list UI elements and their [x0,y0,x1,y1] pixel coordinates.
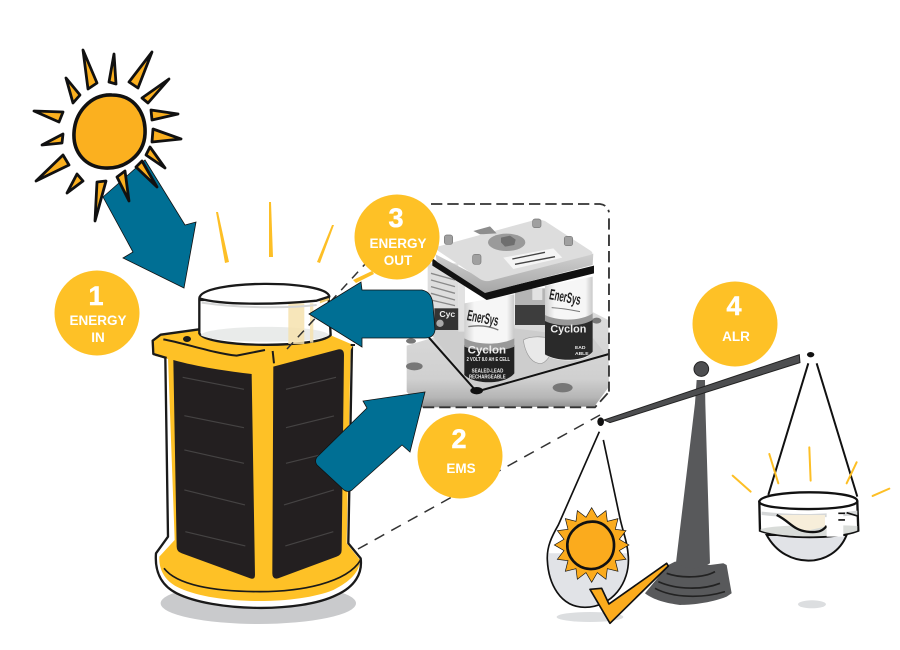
right pan strings [768,363,857,497]
glow rays on right pan [733,447,889,496]
right pan dome [767,535,847,561]
pivot ball [694,362,709,376]
lantern lens [199,284,331,345]
back cell centre [515,288,546,325]
cell right [545,277,593,360]
badge 2: EMS: EMS [446,461,476,476]
icon: sun [34,50,181,221]
badge 4: ALR [692,282,778,366]
cell right: EnerSys [548,286,582,309]
battery top plate [432,219,594,300]
rays above lantern [216,202,334,263]
solar lantern [153,284,361,624]
dashed callout line: lantern to battery [358,415,600,549]
right pan shadow [798,600,826,608]
battery photo [405,204,609,407]
scale beam [604,355,800,423]
cell right: ABLE [575,351,589,357]
scale post [676,380,710,568]
check mark [590,563,668,623]
arrow: energy in [103,160,196,288]
cell front: Cyclon [468,344,506,356]
scale base ridges [655,572,725,596]
dashed callout line: lens to battery [287,262,367,349]
arrow: energy out [309,282,435,347]
cell front: SEALED-LEAD [472,368,503,374]
cell front [464,294,514,382]
solar panel left [173,360,255,579]
scale base [645,562,732,605]
small sun [554,508,629,582]
back cell left: Cyc [439,309,455,319]
arrow: energy to EMS [316,392,425,492]
dashed photo frame [405,204,609,407]
mounting disc [407,312,609,407]
badge 4: ALR: 4 [726,291,742,321]
badge 1: energy in: 1 [88,281,104,311]
balance scale [547,352,889,623]
lantern shadow [161,583,356,624]
left pan shadow [557,612,623,622]
badge 2: EMS: 2 [451,424,467,454]
cell front: RECHARGEABLE [469,374,506,380]
battery tray [432,325,605,390]
badge 1: energy in: ENERGY [69,313,127,328]
solar panel right [272,349,344,579]
badge 4: ALR: ALR [722,329,750,344]
back cell left [428,263,465,332]
lens on right pan [759,492,858,537]
badge 3: energy out: OUT [384,253,413,268]
badge 1: energy in: IN [91,330,105,345]
badge 2: EMS [418,414,502,498]
cell right: Cyclon [550,323,587,335]
cell front: 2 VOLT 8.0 AH E CELL [467,357,511,363]
badge 1: energy in [54,270,140,356]
badge 3: energy out: ENERGY [369,236,427,251]
badge 3: energy out: 3 [388,203,404,233]
cell front: EnerSys [466,307,500,330]
beam end caps [597,352,814,426]
badge 3: energy out [354,194,440,280]
lantern body [156,345,361,608]
yellow ray behind callout [353,271,374,283]
left pan [547,432,628,607]
cell right: EAD [575,345,586,351]
lantern collar [153,330,353,368]
